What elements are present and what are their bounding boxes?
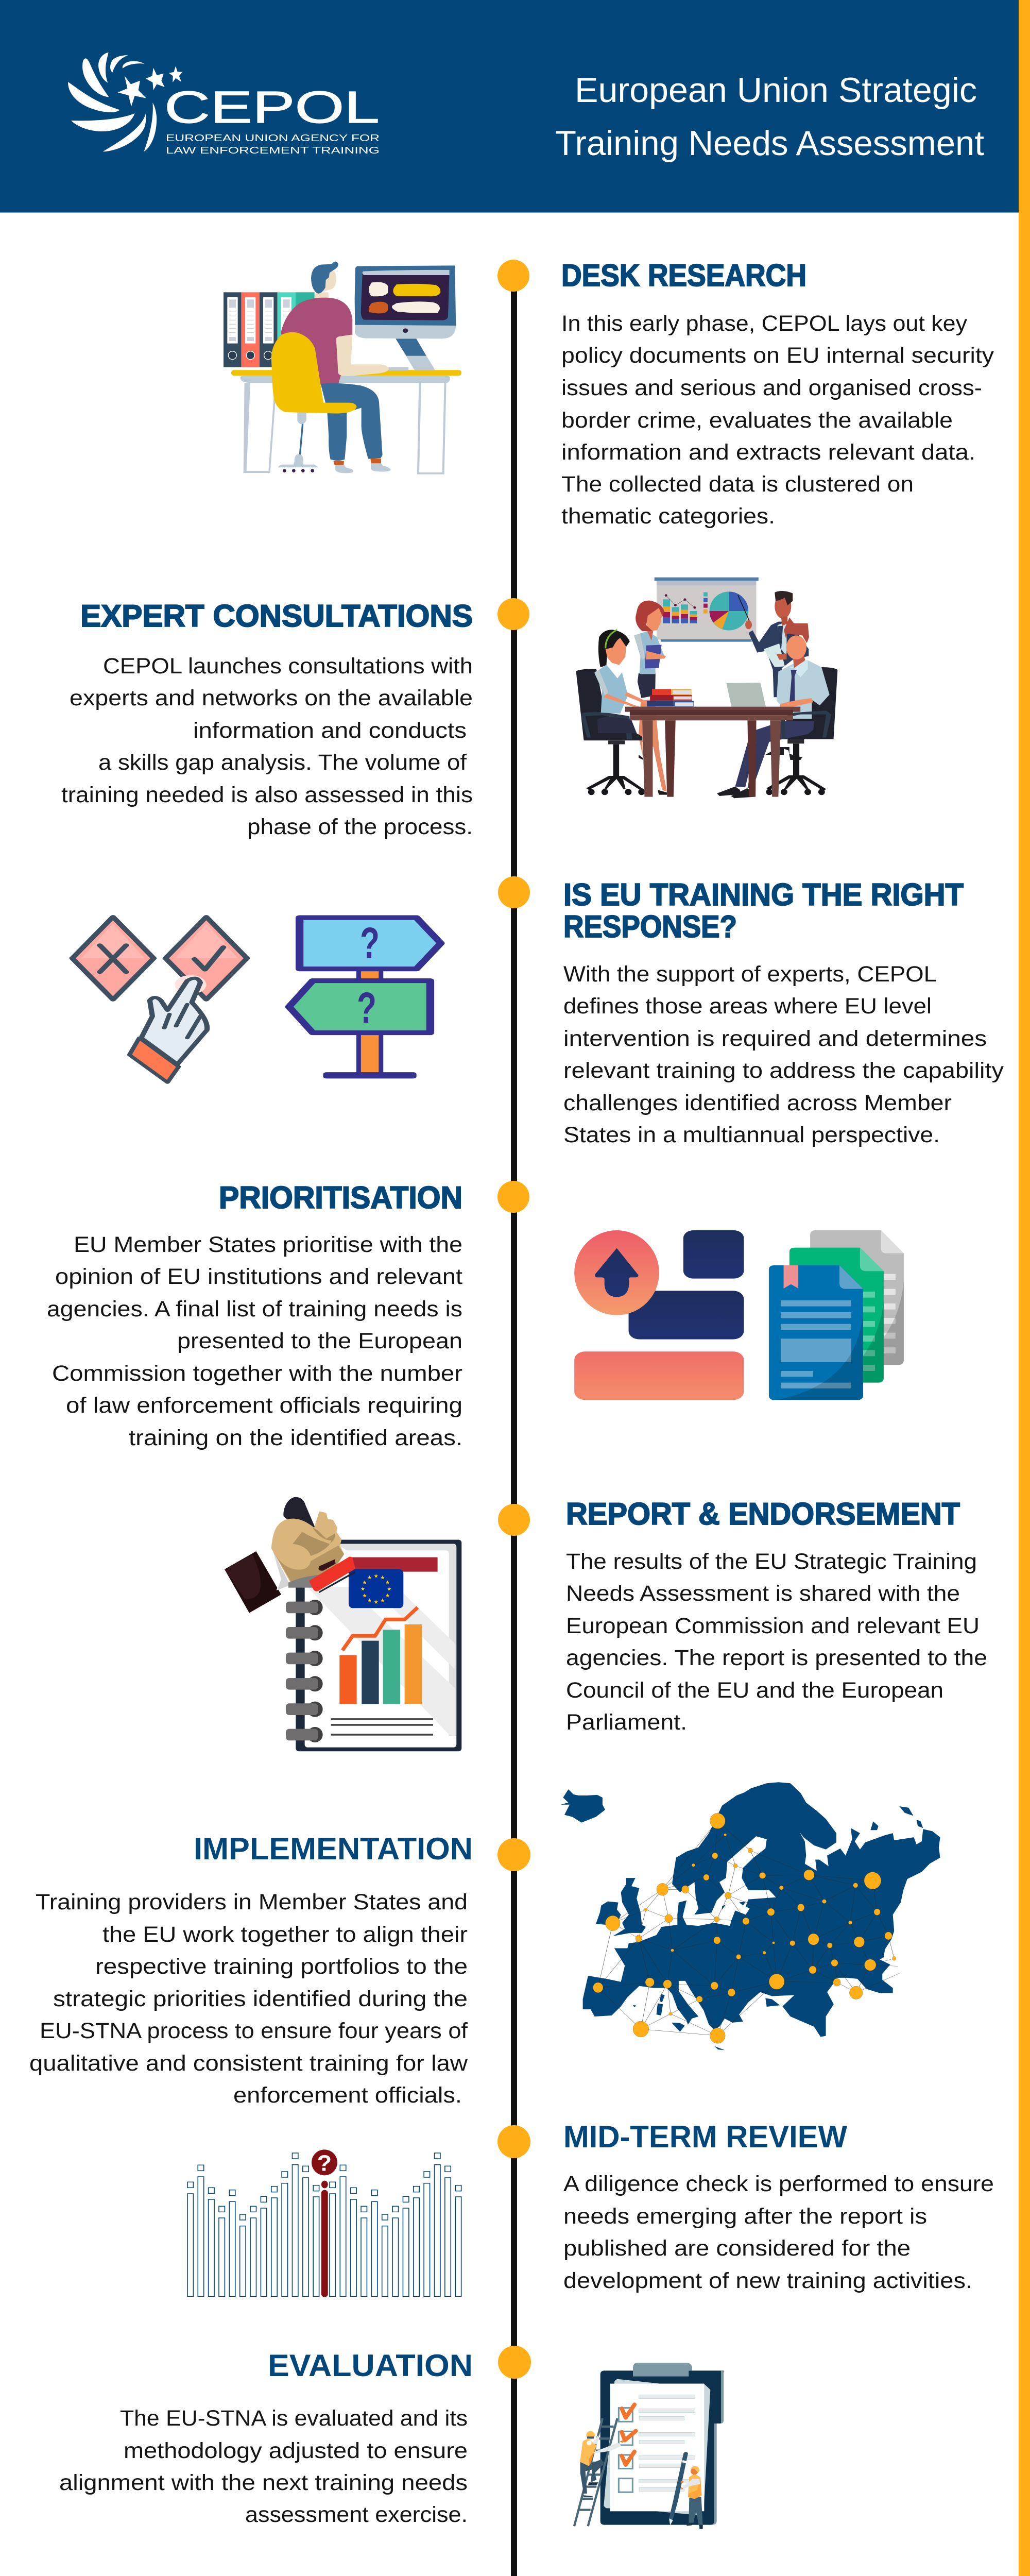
text: desk research: The collected data is clustered on xyxy=(561,472,914,497)
text: desk research: border crime, evaluates the available xyxy=(561,408,953,433)
text: desk research: information and extracts relevant data. xyxy=(561,440,975,465)
text: expert consultations: training needed is also assessed in this xyxy=(61,783,473,807)
chart: outlined bars with highlighted question bar xyxy=(187,2149,461,2297)
EU flag: ★ xyxy=(380,1575,385,1581)
timeline xyxy=(497,260,531,2576)
table xyxy=(625,707,800,797)
timeline dot 3 xyxy=(498,876,530,908)
icon: signpost with question marks: ? xyxy=(360,919,380,967)
text: prioritisation: training on the identified areas. xyxy=(129,1426,462,1450)
report notebook xyxy=(296,1540,461,1751)
heading: desk research: DESK RESEARCH xyxy=(561,258,806,293)
laptop xyxy=(726,683,766,707)
EU flag: ★ xyxy=(367,1575,372,1581)
icon: clipboard checklist with workers xyxy=(574,2363,724,2529)
EU flag: ★ xyxy=(385,1580,390,1586)
header banner xyxy=(0,0,1019,213)
text: evaluation: methodology adjusted to ensure xyxy=(124,2438,468,2463)
hand with stamp xyxy=(225,1497,355,1613)
text: mid-term review: A diligence check is performed to ensure xyxy=(563,2172,994,2196)
seated woman and chair xyxy=(576,630,647,795)
seated man and chair xyxy=(717,617,837,798)
text: is EU training the right response: relevant training to address the capability xyxy=(563,1058,1004,1083)
spiral binding xyxy=(286,1600,323,1742)
text: evaluation: alignment with the next training needs xyxy=(59,2470,468,2495)
title xyxy=(555,71,984,163)
heading: evaluation: EVALUATION xyxy=(268,2348,473,2383)
text: desk research xyxy=(561,311,994,529)
EU flag: ★ xyxy=(374,1573,379,1579)
presentation board xyxy=(655,578,759,642)
timeline dot 5 xyxy=(498,1504,530,1536)
text: implementation: qualitative and consistent training for law xyxy=(29,2051,468,2076)
icon: signpost with question marks xyxy=(289,918,441,1078)
heading: mid-term review: MID-TERM REVIEW xyxy=(563,2120,847,2154)
text: is EU training the right response: intervention is required and determines xyxy=(563,1026,987,1051)
text: prioritisation: presented to the European xyxy=(177,1329,462,1353)
text: report and endorsement: Parliament. xyxy=(566,1710,687,1735)
EU flag: ★ xyxy=(360,1586,366,1592)
text: evaluation: The EU-STNA is evaluated and its xyxy=(120,2406,468,2431)
text: is EU training the right response: challenges identified across Member xyxy=(563,1091,952,1115)
timeline dot 1 xyxy=(497,260,529,292)
icon: priority blocks with up arrow xyxy=(574,1230,744,1400)
text: mid-term review xyxy=(563,2172,994,2293)
text: report and endorsement: Council of the EU and the European xyxy=(566,1678,943,1703)
timeline dot 8 xyxy=(498,2346,531,2379)
text: implementation: strategic priorities identified during the xyxy=(53,1987,468,2011)
standing woman xyxy=(634,601,667,795)
text: mid-term review: needs emerging after the report is xyxy=(563,2204,927,2229)
text: implementation: EU-STNA process to ensure four years of xyxy=(40,2019,468,2043)
text: mid-term review: published are considered for the xyxy=(563,2236,911,2261)
text: desk research: issues and serious and organised cross- xyxy=(561,376,982,400)
text: desk research: thematic categories. xyxy=(561,504,775,529)
text: prioritisation: opinion of EU institutions and relevant xyxy=(55,1264,462,1289)
timeline dot 6 xyxy=(497,1838,530,1871)
landmass xyxy=(560,1782,940,2050)
title: Training Needs Assessment xyxy=(555,124,984,163)
text: expert consultations xyxy=(61,654,473,839)
text: implementation: the EU work together to align their xyxy=(102,1922,468,1947)
text: implementation: respective training portfolios to the xyxy=(95,1954,468,1979)
heading: is EU training the right response: IS EU TRAINING THE RIGHT xyxy=(563,877,964,912)
text: implementation xyxy=(29,1890,468,2108)
icon: report being stamped xyxy=(225,1497,461,1751)
bar chart xyxy=(339,1607,422,1704)
text: expert consultations: phase of the process. xyxy=(247,815,473,839)
text: prioritisation: agencies. A final list of training needs is xyxy=(47,1297,462,1321)
network links xyxy=(598,1821,899,2036)
timeline dot 4 xyxy=(497,1181,529,1213)
EU flag: ★ xyxy=(362,1580,367,1586)
text: report and endorsement: agencies. The report is presented to the xyxy=(566,1646,987,1670)
text: prioritisation: Commission together with the number xyxy=(52,1361,462,1386)
books xyxy=(647,689,694,706)
logo tagline: LAW ENFORCEMENT TRAINING xyxy=(166,145,380,156)
heading: is EU training the right response xyxy=(563,877,964,944)
timeline dot 7 xyxy=(497,2125,530,2158)
map of Europe with network nodes xyxy=(560,1782,940,2050)
network nodes xyxy=(593,1813,896,2043)
text: is EU training the right response: States in a multiannual perspective. xyxy=(563,1123,940,1147)
text: mid-term review: development of new training activities. xyxy=(563,2268,972,2293)
EU flag: ★ xyxy=(380,1598,385,1604)
text: is EU training the right response: With the support of experts, CEPOL xyxy=(563,962,937,987)
heading: prioritisation: PRIORITISATION xyxy=(219,1180,462,1215)
logo wordmark: CEPOL xyxy=(164,82,380,132)
icon: cross and check diamonds with pointing hand xyxy=(72,917,247,1082)
text: prioritisation: of law enforcement officials requiring xyxy=(66,1393,462,1418)
page side stripe xyxy=(1019,0,1030,2576)
EU flag: ★ xyxy=(385,1592,390,1599)
logo tagline xyxy=(166,132,380,156)
pen with worker xyxy=(669,2452,703,2529)
text: is EU training the right response xyxy=(563,962,1004,1147)
CEPOL logo xyxy=(68,53,380,156)
EU flag: ★ xyxy=(362,1592,367,1599)
ladder with worker xyxy=(574,2418,623,2526)
icon: stacked documents xyxy=(769,1230,904,1400)
EU flag: ★ xyxy=(387,1586,392,1592)
icon: signpost with question marks: ? xyxy=(357,984,376,1032)
logo tagline: EUROPEAN UNION AGENCY FOR xyxy=(166,132,380,143)
text: is EU training the right response: defines those areas where EU level xyxy=(563,994,932,1019)
heading: is EU training the right response: RESPONSE? xyxy=(563,909,737,944)
text: expert consultations: experts and networks on the available xyxy=(70,686,473,710)
timeline dot 2 xyxy=(497,598,529,630)
text: prioritisation: EU Member States prioritise with the xyxy=(74,1232,462,1257)
EU flag: ★ xyxy=(367,1598,372,1604)
text: desk research: In this early phase, CEPOL lays out key xyxy=(561,311,968,336)
heading: implementation: IMPLEMENTATION xyxy=(194,1832,473,1866)
text: implementation: enforcement officials. xyxy=(233,2083,462,2108)
chart: outlined bars with highlighted question bar: ? xyxy=(317,2150,332,2176)
EU flag: ★ xyxy=(374,1599,379,1605)
text: report and endorsement: Needs Assessment is shared with the xyxy=(566,1581,960,1606)
heading: expert consultations: EXPERT CONSULTATIONS xyxy=(80,599,473,633)
icon: person at desk with binders xyxy=(224,262,461,474)
presenter man xyxy=(745,591,809,760)
clipboard xyxy=(600,2363,724,2525)
text: prioritisation xyxy=(47,1232,462,1450)
text: evaluation: assessment exercise. xyxy=(245,2502,468,2527)
text: evaluation xyxy=(59,2406,468,2527)
text: report and endorsement: The results of the EU Strategic Training xyxy=(566,1549,977,1574)
text: desk research: policy documents on EU internal security xyxy=(561,343,994,368)
text: report and endorsement xyxy=(566,1549,987,1735)
text: expert consultations: information and conducts xyxy=(193,718,467,743)
heading: report and endorsement: REPORT & ENDORSEMENT xyxy=(566,1497,960,1531)
icon: meeting around a table xyxy=(576,578,837,798)
text: implementation: Training providers in Member States and xyxy=(36,1890,468,1914)
text: report and endorsement: European Commission and relevant EU xyxy=(566,1614,980,1638)
text: expert consultations: CEPOL launches consultations with xyxy=(103,654,473,679)
EU flag xyxy=(349,1569,403,1608)
text: expert consultations: a skills gap analysis. The volume of xyxy=(98,750,467,775)
logo emblem xyxy=(68,53,182,151)
title: European Union Strategic xyxy=(575,71,977,110)
